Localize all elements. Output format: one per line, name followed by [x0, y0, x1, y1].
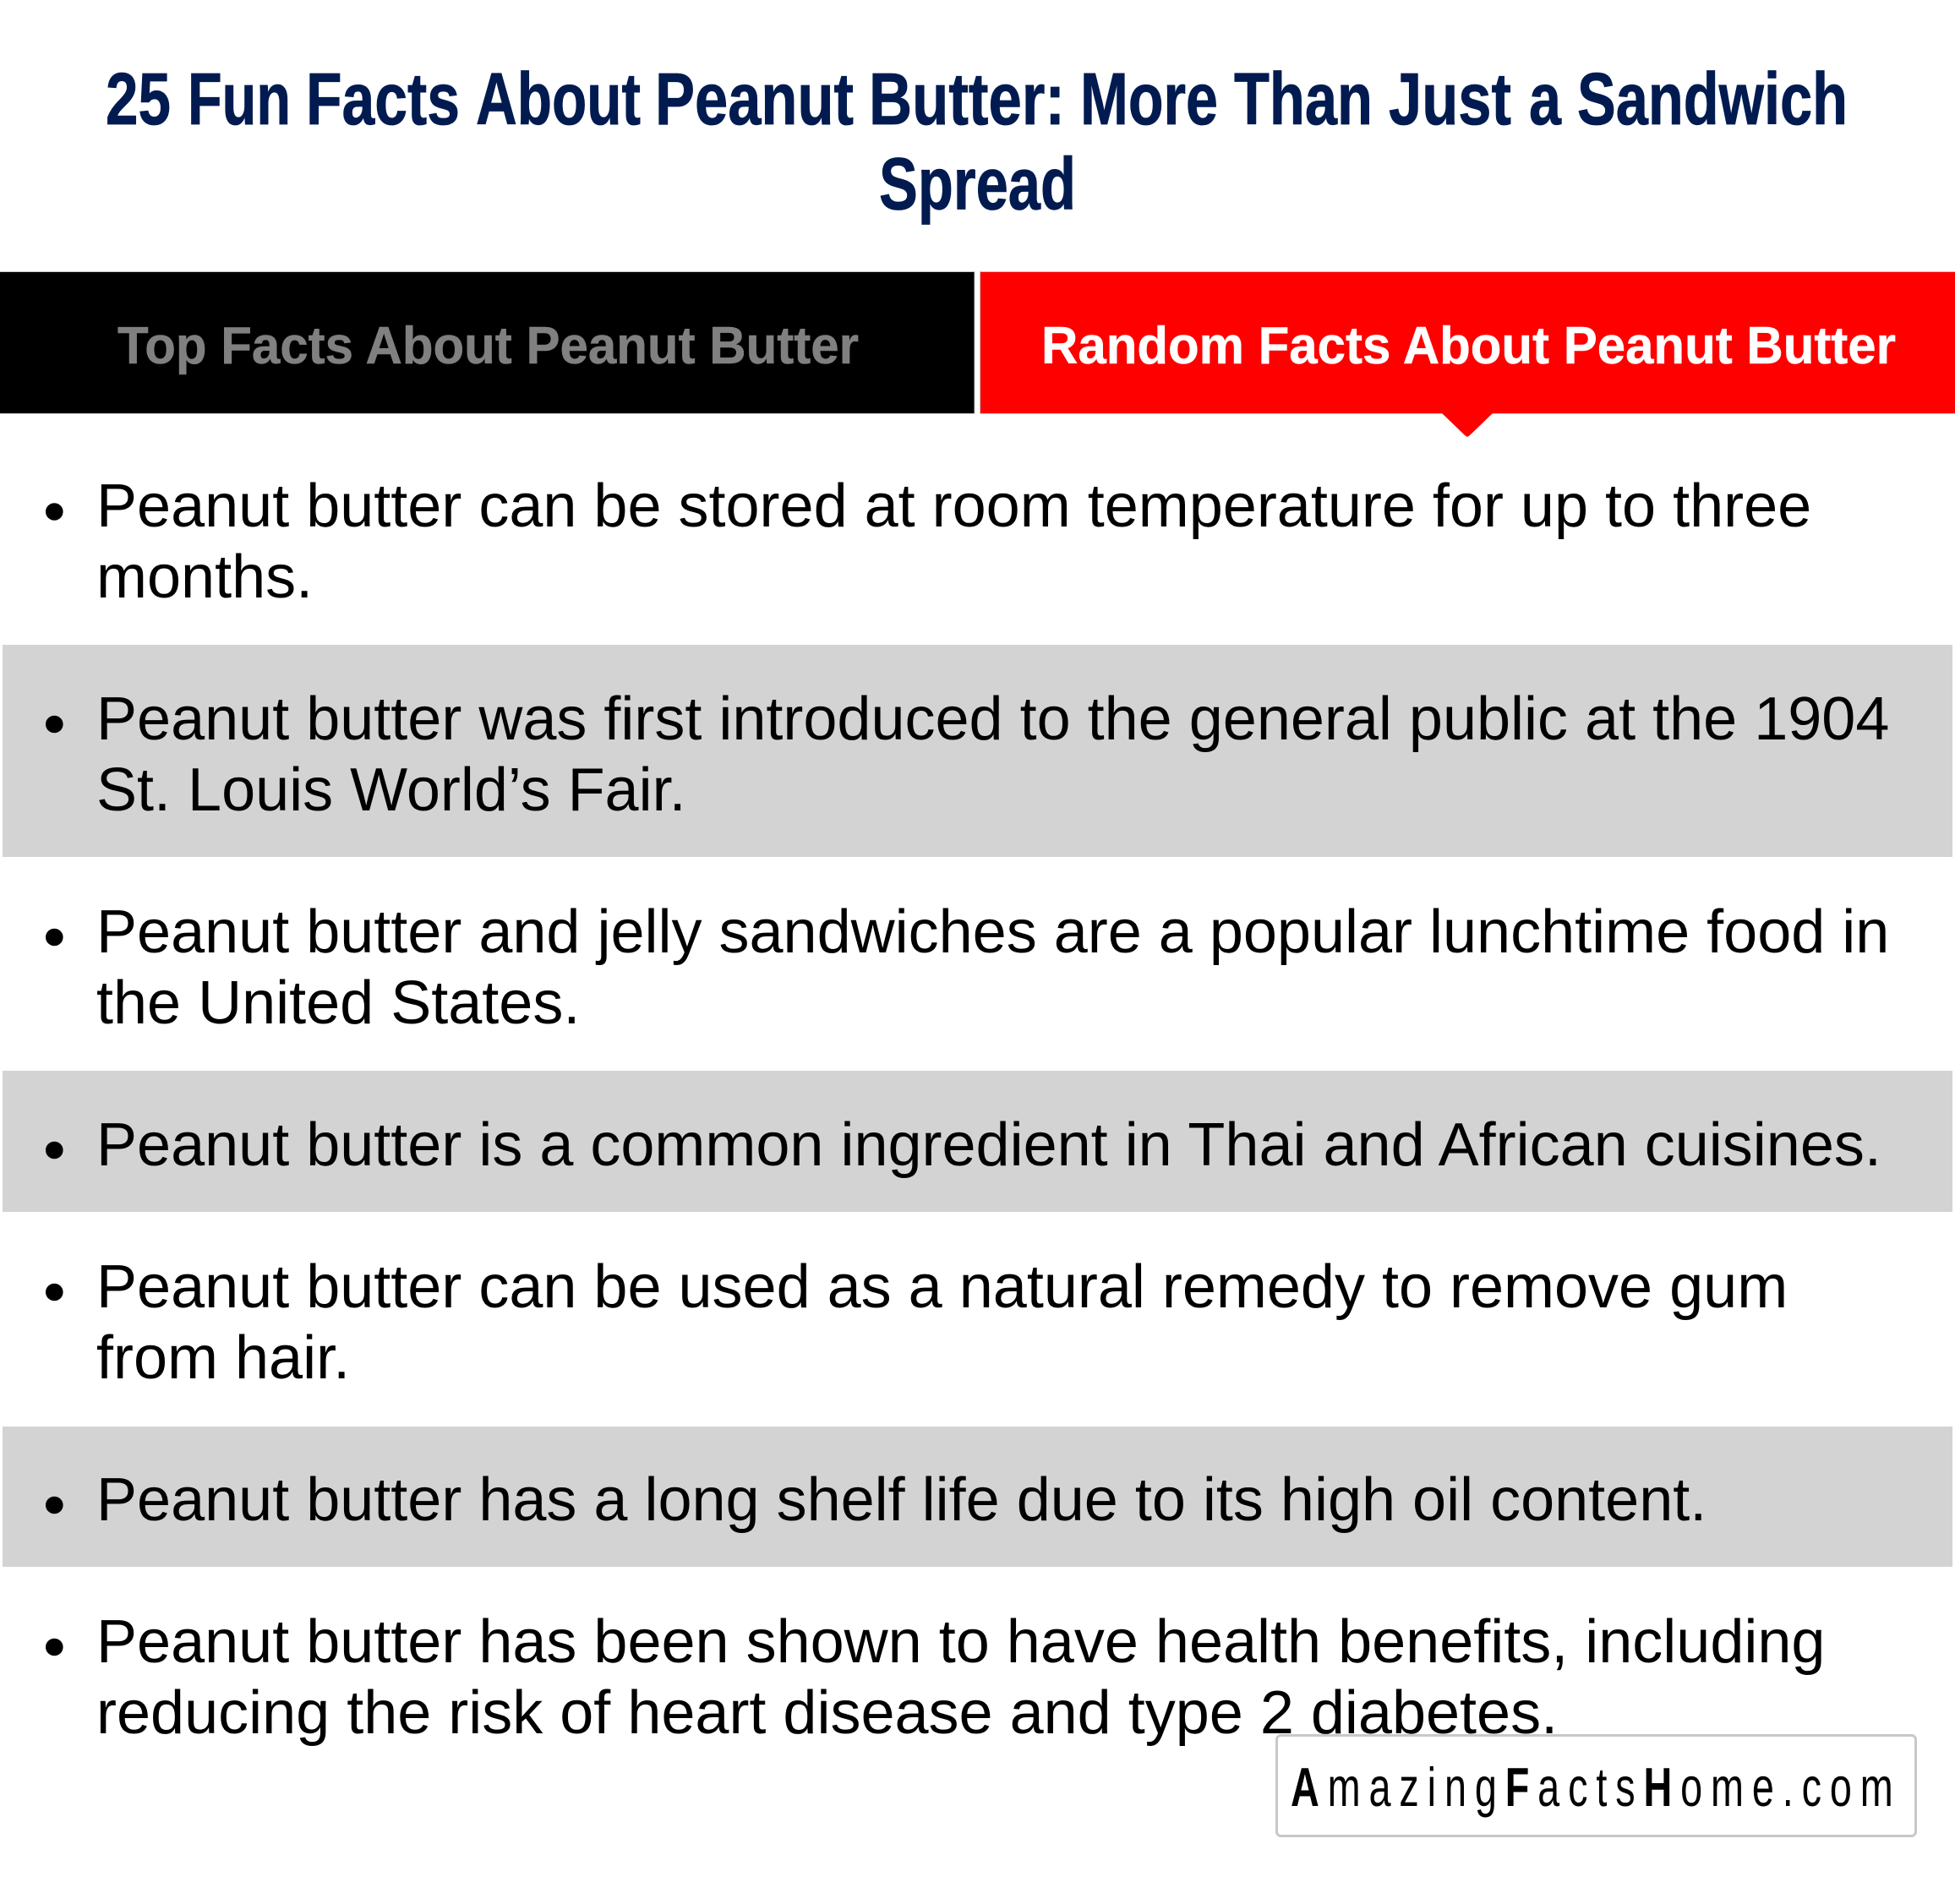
fact 5: Peanut butter can be used as a natural remedy to remove gum [96, 1253, 1788, 1321]
fact 7: reducing the risk of heart disease and type 2 diabetes. [96, 1679, 1558, 1747]
title: About [476, 58, 641, 140]
fact 2: Peanut butter was first introduced to the general public at the 1904 [96, 685, 1889, 753]
watermark badge: AmazingFactsHome.com [1291, 1758, 1893, 1819]
title: Than [1234, 58, 1373, 140]
fact 6: Peanut butter has a long shelf life due to its high oil content. [96, 1466, 1707, 1534]
fact 3 [46, 898, 1889, 1037]
fact 6 [3, 1427, 1952, 1567]
title: Peanut [655, 58, 854, 140]
title: Just [1389, 58, 1511, 140]
fact 4 [3, 1071, 1952, 1212]
fact 5: from hair. [96, 1324, 350, 1392]
fact 7: Peanut butter has been shown to have health benefits, including [96, 1608, 1825, 1676]
tab: top facts: Top Facts About Peanut Butter [117, 317, 859, 375]
title: Sandwich [1577, 58, 1848, 140]
title: a [1529, 58, 1561, 140]
title [106, 58, 1848, 225]
tab: random facts (active) [980, 272, 1955, 437]
watermark badge [1276, 1736, 1915, 1836]
title: More [1080, 58, 1218, 140]
fact 5 [46, 1253, 1788, 1392]
title: 25 [106, 58, 171, 140]
tab: top facts [0, 272, 975, 414]
fact 7 [46, 1608, 1825, 1747]
title: Spread [879, 144, 1076, 225]
fact 3: the United States. [96, 969, 580, 1037]
fact 1 [46, 472, 1811, 611]
fact 2 [3, 645, 1952, 857]
fact 2: St. Louis World’s Fair. [96, 756, 686, 824]
fact 1: Peanut butter can be stored at room temperature for up to three [96, 472, 1811, 540]
tab: random facts (active): Random Facts About Peanut Butter [1041, 317, 1896, 375]
fact 3: Peanut butter and jelly sandwiches are a popular lunchtime food in [96, 898, 1889, 966]
fact 4: Peanut butter is a common ingredient in Thai and African cuisines. [96, 1111, 1881, 1179]
title: Fun [188, 58, 291, 140]
title: Butter: [869, 58, 1065, 140]
title: Facts [306, 58, 460, 140]
fact 1: months. [96, 543, 313, 611]
